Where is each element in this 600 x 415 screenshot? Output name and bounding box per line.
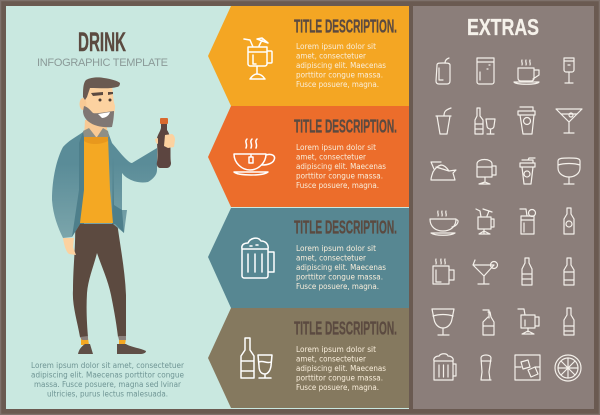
text: step 2: adipiscing elit. Maecenas	[296, 161, 386, 171]
icon: bottle and wine glass	[241, 338, 272, 378]
text: step 2: Lorem ipsum dolor sit	[296, 142, 377, 152]
icon: can with straw	[436, 58, 450, 84]
footer text block: massa. Fusce posuere, magna sed lvinar	[34, 379, 182, 389]
icon: bottle and glass	[475, 108, 495, 134]
icon: round wine glass	[558, 158, 580, 184]
icon: bottle with straw	[483, 310, 494, 335]
title: DRINK	[78, 27, 126, 57]
icon: lager bottle	[564, 308, 574, 335]
icon: glass mug with straw	[518, 309, 539, 334]
text: step 1	[296, 41, 386, 89]
footer text block	[31, 360, 185, 398]
heading: step 2: TITLE DESCRIPTION.	[294, 116, 397, 136]
heading: step 1: TITLE DESCRIPTION.	[294, 16, 397, 36]
text: step 4: amet, consectetuer	[296, 354, 367, 364]
icon: kettle	[431, 162, 456, 180]
text: step 2	[296, 142, 386, 190]
icon: latte glass	[477, 160, 496, 184]
panel: step 4 olive	[208, 308, 409, 408]
text: step 2: amet, consectetuer	[296, 152, 367, 162]
icon: soda bottle	[522, 258, 532, 285]
text: step 1: Lorem ipsum dolor sit	[296, 41, 377, 51]
icon: takeaway cup logo	[524, 171, 530, 177]
text: step 4	[296, 344, 386, 392]
text: step 4: Fusce posuere, magna.	[296, 382, 379, 392]
icon: whiskey glass with ice	[515, 355, 540, 380]
illustration: man holding bottle	[52, 77, 175, 354]
icon: cocktail mug	[476, 209, 494, 234]
icon: citrus on glass	[528, 210, 536, 216]
panel: step 3 teal	[208, 208, 409, 308]
icon: martini with citrus	[473, 260, 494, 284]
text: step 1: porttitor congue massa.	[296, 70, 383, 80]
text: step 2: Fusce posuere, magna.	[296, 180, 379, 190]
icon: citrus slice	[555, 355, 581, 381]
text: step 4: porttitor congue massa.	[296, 372, 383, 382]
icon: champagne flute	[564, 58, 574, 83]
panel: left background	[6, 6, 409, 409]
text: step 2: porttitor congue massa.	[296, 170, 383, 180]
icon: tea cup	[234, 139, 275, 175]
subtitle: INFOGRAPHIC TEMPLATE	[37, 57, 168, 69]
panel: step 2 red-orange	[208, 106, 409, 207]
icon grid	[430, 58, 582, 381]
icon: coffee cup	[514, 60, 539, 84]
icon: takeaway coffee	[518, 107, 535, 134]
text: step 3: Lorem ipsum dolor sit	[296, 243, 377, 253]
panel: step 1 orange	[208, 6, 409, 106]
icon: tall glass	[477, 58, 494, 84]
panel: extras background	[413, 6, 594, 409]
icon: takeaway with straw	[520, 158, 535, 184]
footer text block: adipiscing elit. Maecenas porttitor congue	[31, 370, 184, 380]
icon: wine goblet	[432, 309, 454, 335]
icon: long drink	[520, 209, 534, 234]
icon: martini olive	[569, 113, 573, 117]
icon: tea cup with saucer	[430, 211, 458, 235]
text: step 3: adipiscing elit. Maecenas	[296, 262, 386, 272]
text: step 1: Fusce posuere, magna.	[296, 79, 379, 89]
heading: extras: EXTRAS	[467, 14, 539, 40]
text: step 3: amet, consectetuer	[296, 252, 367, 262]
icon: beer mug	[242, 238, 274, 278]
footer text block: Lorem ipsum dolor sit amet, consectetuer	[31, 360, 185, 370]
icon: beer bottle label	[566, 221, 572, 227]
icon: takeaway coffee logo	[524, 118, 530, 124]
icon: citrus on martini	[490, 262, 498, 268]
text: step 3	[296, 243, 386, 291]
icon: beer mug	[434, 354, 456, 380]
icon: beer glass	[481, 355, 491, 380]
icon: martini	[556, 109, 582, 133]
footer text block: ultricies, purus lectus malesuada.	[47, 388, 168, 398]
icon: cocktail mug	[244, 38, 272, 79]
text: step 4: adipiscing elit. Maecenas	[296, 363, 386, 373]
icon: mug with steam	[433, 259, 454, 284]
text: step 3: porttitor congue massa.	[296, 272, 383, 282]
icon: cup with straw	[436, 108, 451, 134]
text: step 3: Fusce posuere, magna.	[296, 281, 379, 291]
text: step 1: amet, consectetuer	[296, 50, 367, 60]
text: step 1: adipiscing elit. Maecenas	[296, 60, 386, 70]
icon: beer bottle with label	[564, 258, 574, 285]
heading: step 3: TITLE DESCRIPTION.	[294, 218, 397, 238]
icon: beer bottle	[564, 208, 574, 234]
text: step 4: Lorem ipsum dolor sit	[296, 344, 377, 354]
heading: step 4: TITLE DESCRIPTION.	[294, 318, 397, 338]
